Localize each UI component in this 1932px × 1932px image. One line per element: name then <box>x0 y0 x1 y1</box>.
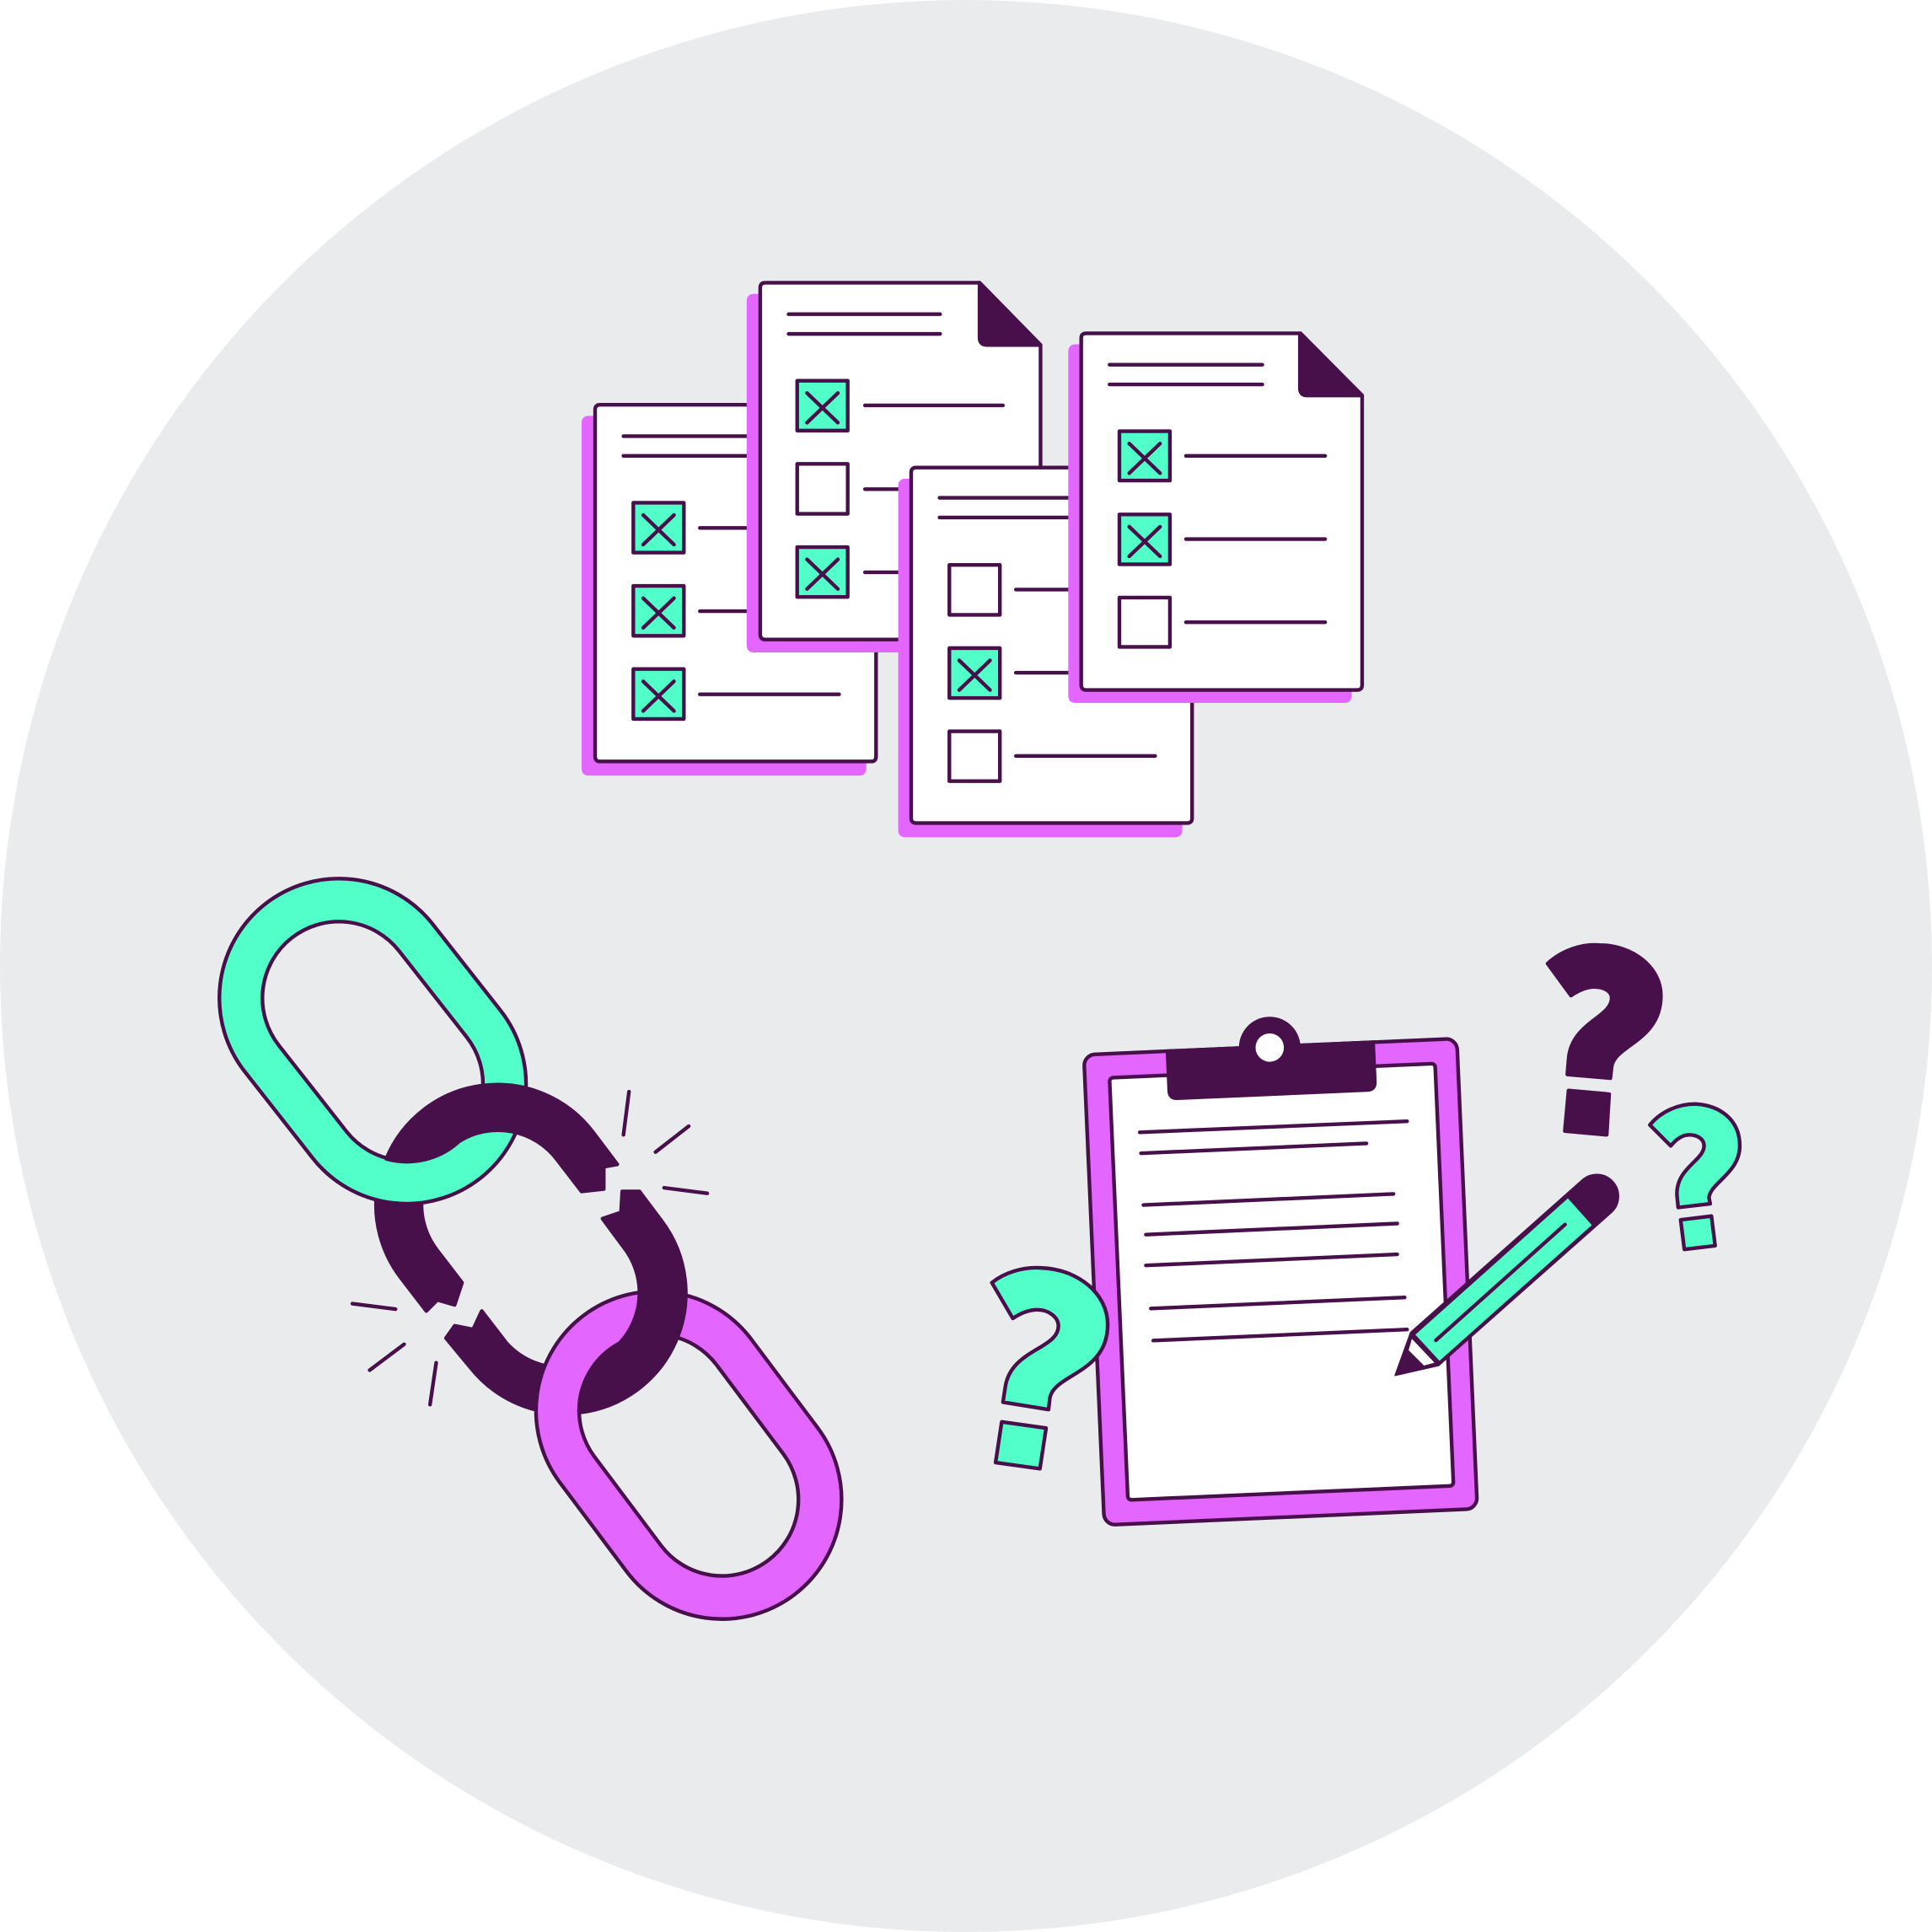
row 2 checked <box>1119 514 1325 564</box>
row 1 checked <box>1119 432 1325 480</box>
magenta link <box>536 1291 841 1619</box>
document 3 <box>899 468 1192 837</box>
shadow <box>582 416 867 775</box>
header lines <box>1109 365 1263 384</box>
question mark dark <box>1548 945 1661 1135</box>
middle link lower-left fragment A <box>376 1189 462 1311</box>
document 2 <box>747 282 1040 652</box>
header lines <box>940 498 1091 518</box>
row 3 checked <box>633 669 839 719</box>
page <box>595 405 876 761</box>
clip <box>1166 1040 1377 1101</box>
middle link lower fragment B <box>446 1311 566 1414</box>
dark curl <box>1548 945 1661 1078</box>
left curl <box>992 1268 1108 1409</box>
document 4 <box>1068 333 1362 703</box>
question mark left <box>992 1268 1108 1468</box>
pencil wood <box>1409 1339 1435 1366</box>
clip ring <box>1237 1016 1301 1080</box>
row 3 empty <box>1119 598 1325 647</box>
middle link right fragment <box>579 1191 686 1413</box>
page <box>1081 333 1362 690</box>
pencil body <box>1415 1199 1591 1360</box>
shadow <box>899 479 1183 837</box>
row 2 checked <box>633 586 839 636</box>
ring hole <box>1255 1033 1285 1062</box>
folded corner <box>979 282 1040 345</box>
board body <box>1084 1038 1478 1525</box>
right curl <box>1650 1104 1740 1207</box>
clipboard board <box>1082 1009 1478 1525</box>
header lines <box>624 436 775 456</box>
shadow <box>747 294 1031 652</box>
middle link upper fragment <box>386 1085 617 1191</box>
header lines <box>789 314 940 334</box>
page <box>911 468 1192 823</box>
folded corner <box>1300 333 1362 395</box>
shadow <box>1068 345 1352 703</box>
dark dot <box>1564 1091 1609 1135</box>
document stack <box>582 282 1362 837</box>
row 1 empty <box>949 565 1155 614</box>
paper lines <box>1140 1121 1407 1340</box>
row 2 checked <box>949 648 1155 698</box>
row 1 checked <box>797 381 1003 431</box>
left dot <box>996 1422 1046 1468</box>
row 2 empty <box>797 464 1003 514</box>
clipboard <box>1082 1009 1478 1525</box>
right dot <box>1681 1216 1715 1249</box>
row 1 checked <box>633 502 839 553</box>
sparks lower left <box>352 1304 436 1404</box>
pencil silhouette with eraser <box>1395 1174 1618 1376</box>
question mark right <box>1650 1104 1740 1249</box>
document 1 <box>582 405 876 775</box>
pencil centre line <box>1436 1225 1565 1340</box>
row 3 empty <box>949 732 1155 781</box>
paper sheet <box>1109 1064 1453 1500</box>
pencil <box>1395 1174 1618 1376</box>
teal link <box>219 878 526 1204</box>
sparks upper right <box>624 1092 707 1194</box>
row 3 checked <box>797 547 1003 597</box>
page <box>760 282 1040 640</box>
broken chain <box>219 878 841 1619</box>
